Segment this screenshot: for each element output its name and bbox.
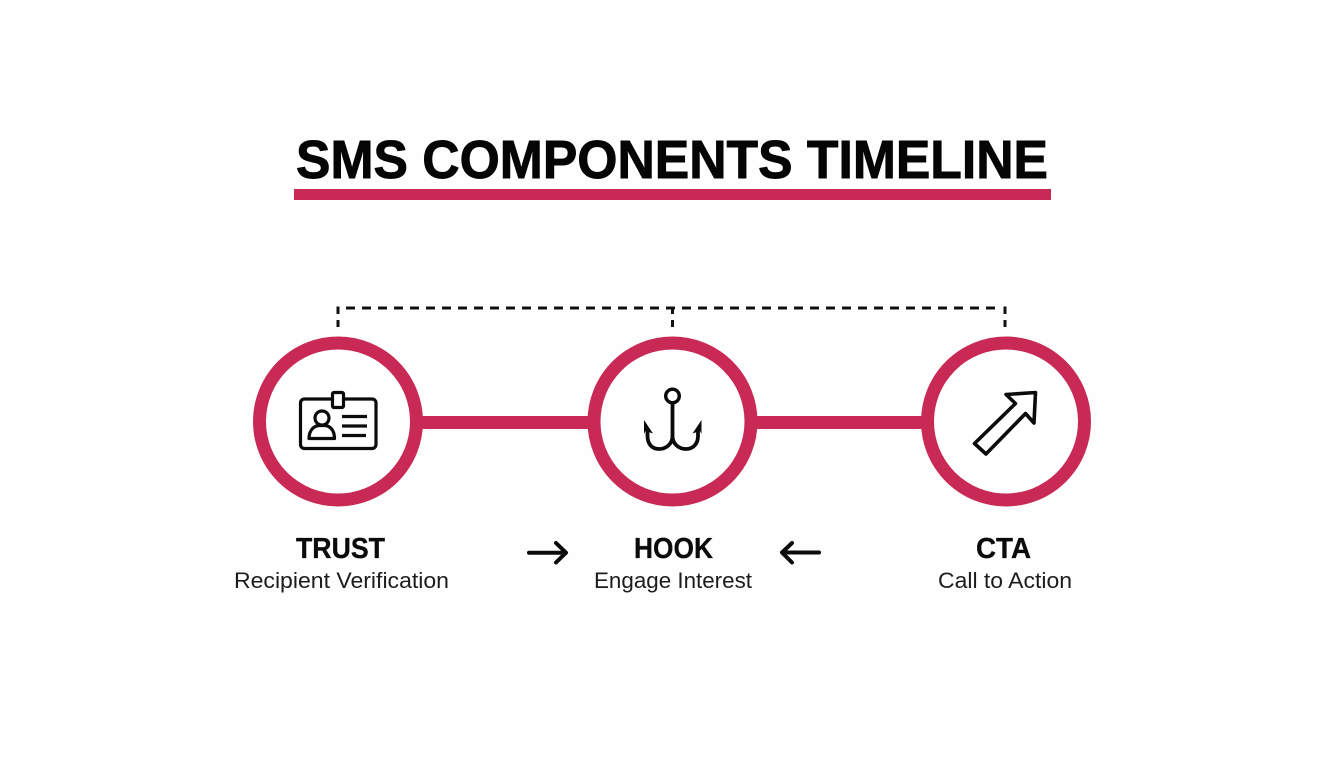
label: cta bbox=[938, 533, 1072, 593]
label: hook bbox=[594, 533, 753, 593]
label: hook: Engage Interest bbox=[594, 568, 753, 593]
label: trust: Recipient Verification bbox=[234, 568, 449, 593]
connector: hook to cta bbox=[754, 416, 924, 429]
arrow: left toward hook bbox=[782, 543, 819, 562]
connector: trust to hook bbox=[420, 416, 591, 429]
icon: treble hook bbox=[644, 389, 702, 449]
label: cta: Call to Action bbox=[938, 568, 1072, 593]
dashed bracket linking the three stages bbox=[338, 306, 1005, 327]
label: cta: CTA bbox=[976, 533, 1031, 565]
stage circle: trust bbox=[260, 343, 416, 500]
label: trust: TRUST bbox=[296, 533, 385, 565]
title: SMS COMPONENTS TIMELINE bbox=[296, 130, 1048, 190]
stage circle: cta bbox=[928, 343, 1084, 500]
icon: diagonal arrow bbox=[974, 392, 1036, 454]
label: hook: HOOK bbox=[634, 533, 713, 565]
title underline bbox=[294, 189, 1051, 200]
icon: ID badge bbox=[300, 392, 376, 448]
stage circle: hook bbox=[594, 343, 751, 500]
label: trust bbox=[234, 533, 449, 593]
arrow: right toward hook bbox=[529, 543, 566, 562]
